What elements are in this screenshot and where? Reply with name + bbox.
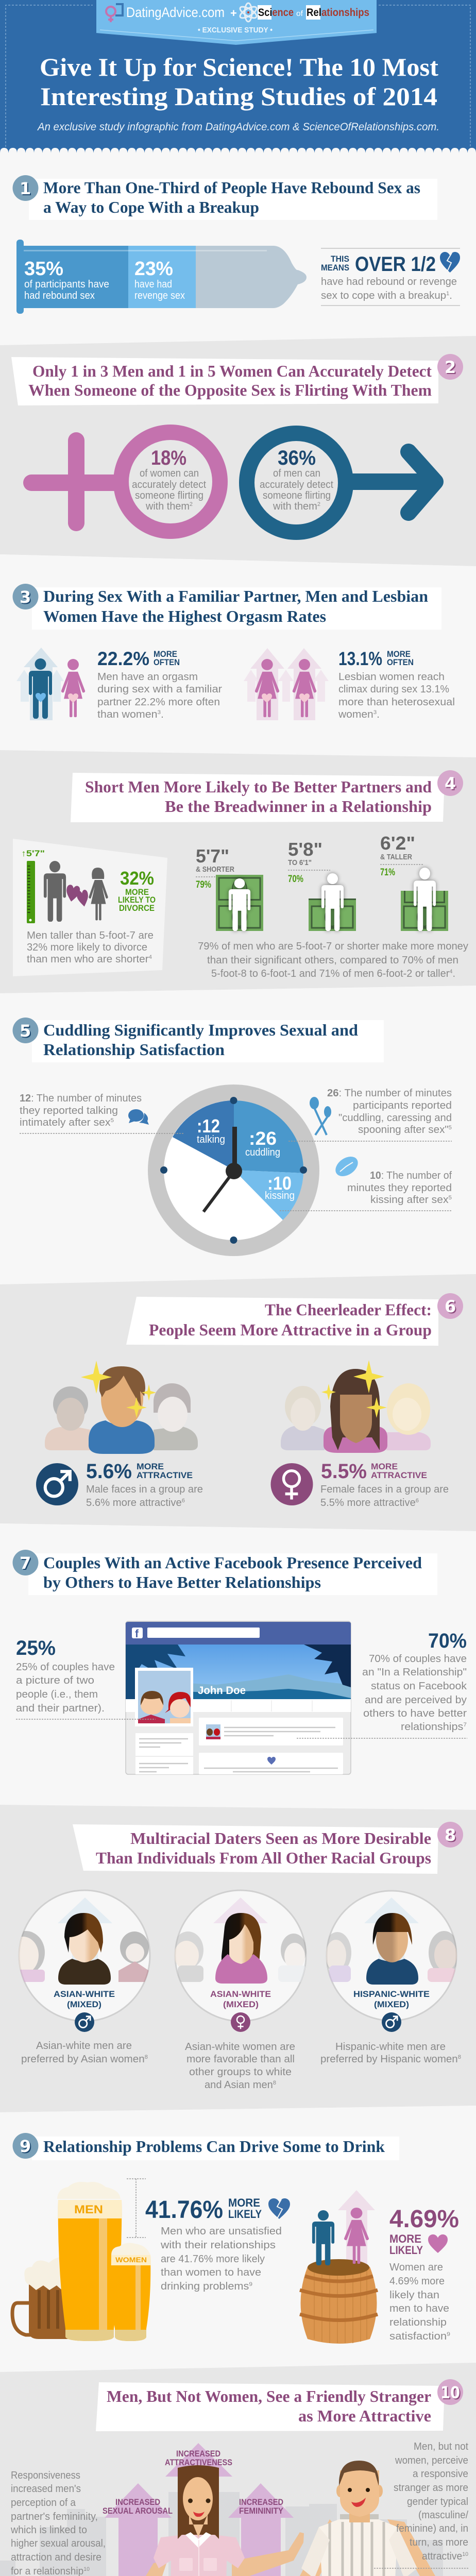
ribbon with logos (96, 0, 377, 45)
panel: section 2 flirting (0, 336, 476, 566)
callout: kissing: 5 (449, 1195, 452, 1201)
panel: section 3 orgasm rates (0, 554, 476, 757)
icon: spoons (310, 1097, 331, 1135)
stat: 13.1%: women (338, 709, 371, 720)
panel: divorce likelihood (13, 839, 167, 976)
card: asian-white women (173, 1890, 307, 2091)
icon: barrel with couple (300, 2190, 378, 2344)
callout: 70%: status on Facebook (371, 1681, 467, 1692)
card: asian-white women: ASIAN-WHITE (210, 1989, 271, 1999)
heading 3: During Sex With a Familiar Partner, Men and Lesbian (43, 587, 428, 605)
card: hispanic-white men: preferred by Hispanic women (320, 2054, 454, 2065)
right text block: attractive (422, 2551, 464, 2562)
chart: height vs income: 70% (288, 874, 303, 885)
stat: 4.69%: likely than (389, 2290, 439, 2301)
callout: over 1/2: THIS (331, 254, 349, 264)
stat: 4.69%: relationship (389, 2317, 447, 2328)
stat: 22.2%: 3 (158, 709, 161, 716)
icon: male symbol with 36%: accurately detect (260, 479, 333, 490)
icon: broken heart (64, 884, 90, 907)
callout: over 1/2: OVER 1/2 (355, 253, 436, 276)
icon: female symbol with 18%: accurately detect (132, 479, 206, 490)
callout: 25%: and their partner). (16, 1703, 105, 1714)
panel: section 1 rebound sex (0, 153, 476, 345)
callout: over 1/2: sex to cope with a breakup (321, 290, 444, 301)
callout: kissing: minutes they reported (347, 1182, 452, 1194)
stat: 41.76%: are 41.76% more likely (161, 2253, 265, 2265)
right text block: (masculine/ (418, 2510, 468, 2521)
icon: male group (45, 1361, 198, 1454)
background: city skyline (0, 2492, 443, 2576)
heading 1: More Than One-Third of People Have Rebound Sex as (43, 178, 420, 197)
illustration: facebook profile mockup: f (135, 1628, 139, 1640)
left text block: higher sexual arousal, (11, 2538, 106, 2549)
heading 8: Than Individuals From All Other Racial Groups (96, 1849, 431, 1867)
card: hispanic-white men: (MIXED) (374, 1999, 409, 2009)
card: hispanic-white men: Hispanic-white men are (335, 2041, 446, 2053)
icon: women's beer glass (111, 2243, 150, 2341)
callout: cuddling: spooning after sex" (358, 1124, 446, 1136)
panel: section 7 facebook (12, 1550, 467, 1775)
chart: height vs income: & SHORTER (196, 865, 234, 874)
arrow: increased attractiveness (165, 2443, 232, 2477)
icon: female symbol with 18%: of women can (140, 468, 199, 479)
panel: divorce likelihood: MORE (125, 887, 149, 897)
heading 3: 3 (20, 587, 31, 607)
panel: section 10 friendly stranger (0, 2363, 476, 2576)
chart: clock of post-sex minutes (148, 1084, 319, 1256)
chart: condom-shaped stacked bar: had rebound sex (24, 290, 95, 301)
chart: clock of post-sex minutes: cuddling (245, 1147, 280, 1158)
heading 10: as More Attractive (298, 2406, 431, 2425)
heading 6 (126, 1293, 463, 1346)
stat: 13.1%: MORE (387, 649, 411, 659)
left text block: perception of a (11, 2497, 76, 2509)
illustration: facebook profile mockup: John Doe (198, 1685, 246, 1697)
chart: height vs income: 79% (196, 879, 211, 890)
stat: 4.69%: MORE (389, 2232, 421, 2245)
callout: cuddling: 26: The number of minutes (327, 1088, 452, 1099)
icon: female symbol with 18%: with them (146, 501, 190, 512)
card: asian-white men: Asian-white men are (36, 2040, 132, 2052)
card: asian-white men: (MIXED) (67, 1999, 101, 2009)
illustration: woman (146, 2465, 304, 2576)
card: asian-white men: 8 (145, 2054, 148, 2060)
right text block: women, perceive (395, 2455, 468, 2466)
card: asian-white women: and Asian men (205, 2079, 273, 2091)
heading 9 (12, 2133, 399, 2160)
chart: height vs income: 5'8" (288, 839, 322, 860)
icon: female symbol with 18%: someone flirting (135, 490, 203, 501)
icon: male symbol with 36%: someone flirting (263, 490, 331, 501)
callout: talking (20, 1093, 184, 1133)
arrow: increased sexual arousal (103, 2483, 173, 2576)
chart: clock of post-sex minutes: kissing (265, 1190, 295, 1201)
chart: height vs income: 6'2" (380, 833, 415, 854)
ribbon with logos: • EXCLUSIVE STUDY • (198, 26, 273, 35)
left text block: partner's femininity, (11, 2511, 98, 2522)
stat: 22.2%: OFTEN (154, 657, 180, 667)
chart: condom-shaped stacked bar (16, 240, 307, 314)
stat: 13.1%: more than heterosexual (338, 697, 455, 708)
stat: 13.1%: climax during sex 13.1% (338, 684, 449, 695)
arrow: increased attractiveness: ATTRACTIVENESS (165, 2458, 232, 2467)
heading 4 (71, 770, 463, 822)
panel: divorce likelihood: 32% (120, 868, 154, 889)
chart: condom-shaped stacked bar: of participants have (24, 279, 109, 290)
stat: 22.2%: . (161, 709, 164, 720)
heading 9: 9 (20, 2137, 31, 2156)
icon: height ruler (27, 861, 35, 923)
left text block: Responsiveness (11, 2470, 80, 2481)
stat: 41.76%: Men who are unsatisfied (161, 2226, 282, 2237)
right text block (374, 2441, 468, 2568)
profile picture (135, 1668, 193, 1726)
heading 8: Multiracial Daters Seen as More Desirable (130, 1829, 431, 1848)
header banner (0, 0, 476, 155)
chart: clock of post-sex minutes: :26 (249, 1128, 277, 1149)
stat: 41.76%: than women to have (161, 2267, 261, 2278)
stat: 22.2%: Men have an orgasm (97, 671, 198, 683)
callout: kissing: kissing after sex (370, 1194, 444, 1206)
callout: over 1/2: . (449, 290, 452, 301)
heading 10: Men, But Not Women, See a Friendly Stranger (107, 2387, 431, 2405)
heading 3: Women Have the Highest Orgasm Rates (43, 607, 326, 625)
stat: 5.6%: Male faces in a group are (86, 1484, 203, 1495)
callout: 25% (16, 1637, 156, 1719)
callout: talking: they reported talking (20, 1105, 118, 1116)
stat: 22.2%: than women (97, 709, 154, 720)
heading 3 (12, 584, 441, 630)
title: Interesting Dating Studies of 2014 (40, 82, 437, 111)
chart: condom-shaped stacked bar: 23% (134, 258, 173, 280)
callout: 70%: 70% of couples have (369, 1653, 467, 1665)
panel: section 5 cuddling (0, 986, 476, 1284)
icon: women's beer glass: WOMEN (115, 2256, 147, 2264)
callout: talking: 5 (111, 1117, 114, 1124)
card: asian-white women: (MIXED) (223, 1999, 259, 2009)
icon: female group (281, 1360, 431, 1453)
stat: 41.76% (145, 2196, 290, 2292)
heading 8 (73, 1822, 463, 1874)
stat: 13.1%: 3 (373, 709, 377, 716)
chart: height vs income: 5-foot-8 to 6-foot-1 and 71% of men 6-foot-2 or taller (211, 968, 450, 979)
icon: lips (332, 1153, 362, 1180)
heading 8: 8 (445, 1825, 456, 1845)
heading 1: a Way to Cope With a Breakup (43, 198, 259, 216)
heading 2: When Someone of the Opposite Sex is Flirting With Them (28, 381, 432, 399)
card: asian-white women: more favorable than all (186, 2054, 295, 2065)
heading 6: The Cheerleader Effect: (265, 1300, 432, 1319)
stat: 5.5%: ATTRACTIVE (371, 1470, 427, 1480)
icon: female symbol with 18% (31, 432, 220, 531)
icon: female symbol with 18%: 18% (151, 447, 186, 469)
panel: section 9 drinking (10, 2133, 458, 2344)
arrow: increased sexual arousal: SEXUAL AROUSAL (103, 2506, 173, 2516)
heading 7 (12, 1550, 437, 1595)
right text block: gender typical (407, 2496, 468, 2507)
arrow: increased sexual arousal: INCREASED (115, 2497, 160, 2507)
left text block: attraction and desire (11, 2552, 101, 2563)
left text block: which is linked to (10, 2524, 87, 2536)
arrow: increased femininity: INCREASED (239, 2497, 283, 2507)
stat: 13.1%: 13.1% (338, 648, 382, 669)
callout: kissing: 10: The number of (370, 1170, 452, 1181)
cover photo (126, 1645, 351, 1699)
stat: 4.69%: 4.69% (389, 2206, 459, 2233)
stat: 5.5%: Female faces in a group are (320, 1484, 449, 1495)
heading 9: Relationship Problems Can Drive Some to Drink (43, 2137, 385, 2156)
panel: divorce likelihood: 32% more likely to divorce (27, 942, 147, 953)
card: asian-white women: Asian-white women are (185, 2041, 295, 2053)
stat: 41.76%: MORE (228, 2196, 260, 2209)
heading 2: Only 1 in 3 Men and 1 in 5 Women Can Accurately Detect (32, 362, 432, 380)
chart: height vs income: TO 6'1" (288, 858, 312, 867)
chart: height vs income: & TALLER (380, 853, 412, 861)
callout: talking: intimately after sex (20, 1117, 106, 1128)
stat: 5.6%: 5.6% more attractive (86, 1497, 180, 1509)
stat: 5.5%: 6 (416, 1498, 419, 1504)
panel: divorce likelihood: LIKELY TO (118, 895, 156, 905)
stat: 41.76%: drinking problems (161, 2281, 242, 2292)
stat: 5.5%: 5.5% (321, 1460, 367, 1483)
ribbon with logos: DatingAdvice.com (126, 5, 225, 20)
callout: 70%: an "In a Relationship" (362, 1667, 467, 1678)
callout: over 1/2: MEANS (321, 263, 349, 273)
illustration: man (300, 2461, 435, 2576)
right text block: 10 (462, 2551, 468, 2557)
callout: 25%: people (i.e., them (16, 1689, 98, 1700)
heading 10 (96, 2379, 463, 2431)
stat: 5.6% (36, 1460, 203, 1509)
right text block: Men, but not (414, 2441, 468, 2452)
stat: 4.69%: Women are (389, 2262, 443, 2273)
icon: two women with arrows (244, 648, 329, 720)
arrow: increased attractiveness: INCREASED (176, 2449, 220, 2459)
icon: male symbol with 36%: of men can (273, 468, 320, 479)
chart: condom-shaped stacked bar: 35% (24, 258, 63, 280)
callout: 70%: and are perceived by (365, 1694, 467, 1706)
icon: dating advice symbol (106, 4, 123, 22)
callout: 70% (297, 1630, 467, 1738)
panel: divorce likelihood: DIVORCE (119, 903, 155, 913)
stat: 22.2%: partner 22.2% more often (97, 697, 220, 708)
stat: 4.69%: satisfaction (389, 2331, 441, 2342)
subtitle: An exclusive study infographic from DatingAdvice.com & ScienceOfRelationships.com. (37, 121, 439, 133)
icon: men's beer glass (57, 2182, 122, 2341)
stat: 4.69%: 4.69% more (389, 2276, 445, 2287)
chart: height vs income: 71% (380, 867, 395, 878)
status post card (199, 1718, 343, 1745)
chart: condom-shaped stacked bar: have had (134, 279, 172, 290)
heading 2: 2 (445, 358, 456, 377)
card: asian-white women: 8 (273, 2080, 276, 2086)
chart: height vs income: . (452, 968, 455, 979)
stat: 4.69% (389, 2206, 459, 2342)
heading 1: 1 (20, 179, 31, 198)
illustration: facebook profile mockup (126, 1621, 351, 1774)
card: asian-white women: other groups to white (189, 2066, 292, 2078)
left text block (10, 2470, 134, 2576)
stat: 4.69%: 9 (447, 2331, 450, 2337)
heading 4: Be the Breadwinner in a Relationship (165, 797, 432, 816)
card: asian-white men (7, 1890, 150, 2065)
ribbon with logos: of (296, 9, 303, 18)
icon: male symbol with 36%: 36% (278, 447, 316, 469)
heading 7: 7 (20, 1553, 31, 1573)
stat: 41.76%: 9 (249, 2281, 252, 2287)
card: asian-white men: ASIAN-WHITE (54, 1989, 115, 1999)
left text block: 10 (83, 2566, 90, 2572)
side cards (135, 1733, 193, 1774)
callout: 70%: relationships (401, 1721, 458, 1733)
stat: 22.2% (97, 648, 222, 720)
stat: 5.6%: MORE (137, 1462, 164, 1471)
stat: 22.2%: MORE (154, 649, 177, 659)
stat: 22.2%: during sex with a familiar (97, 684, 222, 695)
stat: 5.5%: 5.5% more attractive (320, 1497, 415, 1509)
stat: 22.2%: 22.2% (97, 648, 149, 669)
stat: 13.1% (338, 648, 455, 720)
heading 5: 5 (20, 1021, 31, 1041)
card: hispanic-white men: 8 (458, 2054, 461, 2060)
ribbon with logos: Relationships (307, 7, 369, 19)
callout: over 1/2 (321, 248, 460, 306)
icon: speech bubbles (128, 1109, 149, 1125)
chart: condom-shaped stacked bar: revenge sex (134, 290, 185, 301)
panel: divorce likelihood: ↑5'7" (21, 849, 45, 858)
right text block: stranger as more (394, 2482, 468, 2494)
callout: 70%: others to have better (363, 1708, 467, 1719)
heading 5: Relationship Satisfaction (43, 1040, 225, 1059)
callout: 70%: 70% (428, 1630, 467, 1652)
chart: height vs income (196, 833, 468, 979)
panel: divorce likelihood: 4 (149, 954, 152, 960)
right text block: feminine) and, in (396, 2523, 468, 2534)
arrow: increased femininity: FEMININITY (239, 2506, 284, 2516)
callout: cuddling: participants reported (353, 1100, 452, 1111)
stat: 4.69%: LIKELY (389, 2244, 423, 2257)
callout: cuddling: "cuddling, caressing and (338, 1112, 452, 1124)
icon: broken heart (440, 252, 460, 273)
callout: cuddling: 5 (449, 1125, 452, 1131)
stat: 4.69%: men to have (389, 2303, 449, 2314)
heading 5: Cuddling Significantly Improves Sexual and (43, 1021, 358, 1039)
stat: 13.1%: OFTEN (387, 657, 414, 667)
left text block: increased men's (11, 2483, 81, 2495)
card: hispanic-white men (320, 1891, 461, 2065)
heading 4: 4 (445, 774, 456, 793)
ribbon with logos: Science (258, 7, 294, 19)
stat: 41.76%: 41.76% (145, 2196, 223, 2224)
callout: over 1/2: have had rebound or revenge (321, 276, 457, 287)
chart: height vs income: 79% of men who are 5-foot-7 or shorter make more money (198, 941, 468, 952)
stat: 13.1%: Lesbian women reach (338, 671, 445, 683)
heading 1 (12, 175, 437, 220)
icon: male symbol with 36%: with them (273, 501, 317, 512)
callout: kissing (280, 1153, 452, 1211)
icon: man and woman with arrows (16, 648, 85, 720)
icon: beer mug (12, 2257, 70, 2339)
card: asian-white men: preferred by Asian women (21, 2054, 141, 2065)
panel: section 6 cheerleader effect (0, 1274, 476, 1531)
ribbon with logos: + (230, 7, 237, 20)
heading 2 (11, 354, 463, 405)
heading 4: Short Men More Likely to Be Better Partners and (85, 777, 432, 796)
icon: male symbol with 36%: 2 (317, 501, 320, 507)
chart: height vs income: 5'7" (196, 845, 229, 867)
chart: height vs income: than their significant others, compared to 70% of men (207, 955, 458, 966)
panel: divorce likelihood: Men taller than 5-foot-7 are (27, 930, 154, 941)
stat: 5.5%: MORE (371, 1462, 398, 1471)
chart: height vs income: 4 (449, 969, 452, 975)
panel: divorce likelihood: than men who are shorter (27, 954, 144, 965)
stat: 5.6%: 6 (182, 1498, 185, 1504)
relationship card (199, 1753, 343, 1774)
panel: section 4 short men (0, 750, 476, 993)
callout: over 1/2: 1 (446, 291, 449, 297)
icon: female symbol with 18%: 2 (190, 501, 193, 507)
stat: 5.6%: 5.6% (86, 1460, 132, 1483)
chart: clock of post-sex minutes: :12 (197, 1115, 220, 1137)
callout: 70%: 7 (463, 1722, 467, 1728)
chart: clock of post-sex minutes: talking (197, 1134, 225, 1145)
callout: 25%: 25% (16, 1637, 56, 1659)
panel: section 8 multiracial (0, 1805, 476, 2112)
title (40, 53, 438, 111)
heading 7: by Others to Have Better Relationships (43, 1573, 321, 1591)
stat: 41.76%: with their relationships (160, 2240, 276, 2251)
icon: broken heart (268, 2198, 290, 2219)
heading 10: 10 (440, 2383, 460, 2402)
heading 6: People Seem More Attractive in a Group (149, 1320, 432, 1339)
callout: 25%: a picture of two (16, 1675, 94, 1686)
callout: 25%: 25% of couples have (16, 1662, 115, 1673)
right text block: a responsive (413, 2468, 468, 2480)
chart: clock of post-sex minutes: :10 (267, 1173, 292, 1194)
heading 5 (12, 1018, 384, 1062)
stat: 5.6%: ATTRACTIVE (137, 1470, 193, 1480)
card: hispanic-white men: HISPANIC-WHITE (353, 1989, 430, 1999)
heading 7: Couples With an Active Facebook Presence Perceived (43, 1553, 422, 1572)
right text block: turn, as more (410, 2537, 468, 2548)
title: Give It Up for Science! The 10 Most (40, 53, 438, 81)
stat: 13.1%: . (377, 709, 380, 720)
stat: 41.76%: LIKELY (228, 2208, 262, 2221)
callout: cuddling (288, 1088, 452, 1141)
icon: male symbol with 36% (247, 433, 435, 532)
heading 6: 6 (445, 1297, 456, 1316)
arrow: increased femininity (228, 2483, 294, 2576)
stat: 5.5% (271, 1460, 449, 1509)
icon: woman with hair (89, 868, 108, 920)
icon: men's beer glass: MEN (74, 2203, 103, 2216)
callout: talking: 12: The number of minutes (20, 1093, 142, 1104)
icon: atom (239, 3, 258, 22)
